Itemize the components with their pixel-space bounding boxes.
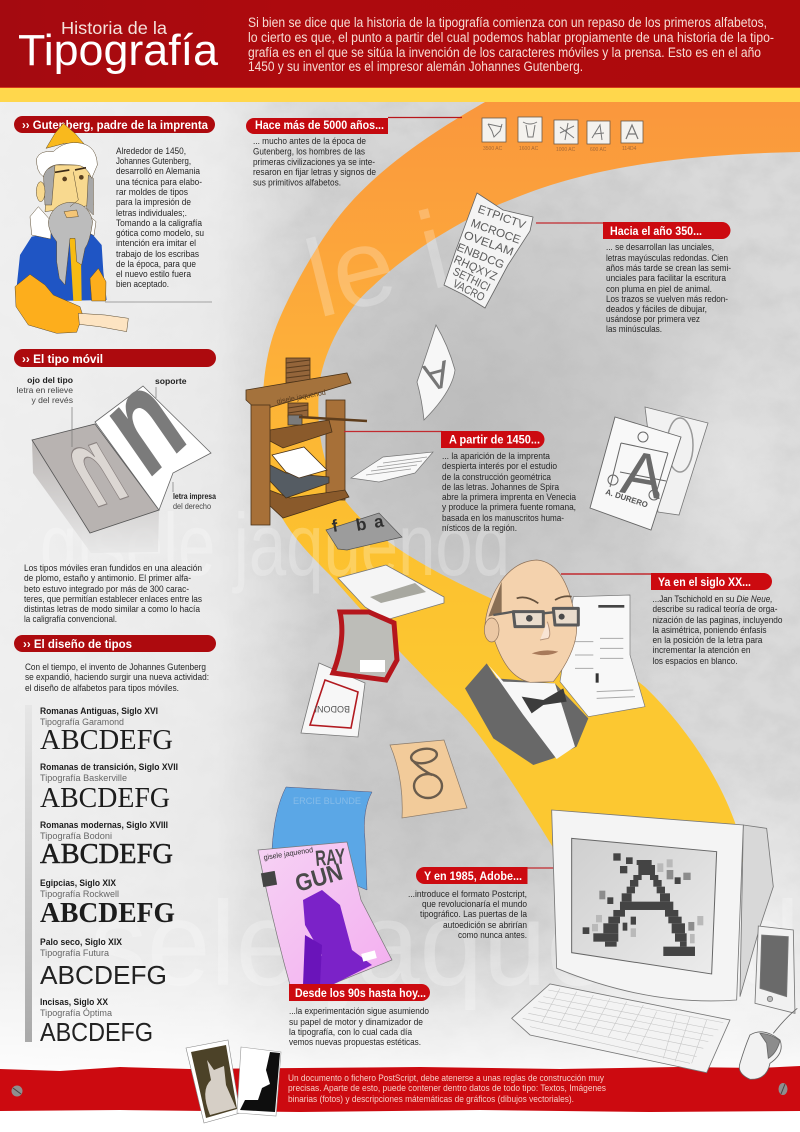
callout: Ya en el siglo XX: ...Jan Tschichold en su Die Neue,	[652, 593, 772, 604]
typeface: Rockwell: ABCDEFG	[40, 898, 175, 929]
text: tipos móviles: teres, que permitían establecer enlaces entre las	[24, 593, 202, 604]
typeface: Rockwell: Tipografía Rockwell	[40, 889, 119, 900]
callout: Y en 1985, Adobe: que revolucionaría el mundo	[422, 898, 527, 909]
typeface: Garamond: Romanas Antiguas, Siglo XVI	[40, 706, 158, 716]
callout: Desde los 90s: la tipografía, con lo cual cada día	[289, 1026, 413, 1037]
typeface: Baskerville	[40, 762, 178, 814]
timeline road	[262, 102, 800, 862]
table line	[105, 301, 212, 303]
callout: Hacia el año 350: con pluma en piel de animal.	[606, 283, 712, 294]
text: Gutenberg: una técnica para elabo-	[116, 176, 202, 187]
illustration: Dürer construction sheets: A. DURERO	[604, 487, 649, 509]
footer band	[0, 1066, 800, 1112]
callout: Y en 1985, Adobe: autoedición se abrirían	[443, 919, 527, 930]
illustration: metal type blocks	[326, 511, 402, 550]
callout: Hace más de 5000 años: Gutenberg, los hombres de las	[253, 146, 365, 156]
panel: El diseño de tipos heading: ›› El diseño de tipos	[23, 637, 132, 651]
illustration: stack of printed papers	[338, 565, 444, 620]
panel: El tipo móvil heading: ›› El tipo móvil	[22, 352, 103, 366]
callout: Hace más de 5000 años: primeras civilizaciones ya se inte-	[253, 156, 375, 167]
callout: Hacia el año 350: letras mayúsculas redondas. Cien	[606, 252, 728, 263]
typeface: Futura: Tipografía Futura	[40, 948, 110, 959]
callout: A partir de 1450: de la construcción geométrica	[442, 471, 552, 482]
callout: A partir de 1450: A partir de 1450...	[449, 432, 540, 446]
illustration: Ray Gun magazine: gisele jaquenod	[263, 845, 314, 862]
callout: Hacia el año 350: Hacia el año 350...	[610, 224, 702, 238]
callout: Hacia el año 350: años más tarde se crean las semi-	[606, 262, 731, 273]
typeface timeline bar	[25, 705, 32, 1042]
icons: early alphabets	[482, 117, 643, 153]
footer text: Un documento o fichero PostScript, debe atenerse a unas reglas de construcción muy	[288, 1072, 604, 1083]
illustration: metal type blocks: b	[354, 514, 368, 535]
typeface: Futura: ABCDEFG	[40, 960, 167, 990]
illustration: red framed layout	[333, 612, 397, 680]
icons: early alphabets: 3500 AC	[483, 146, 503, 152]
text: Gutenberg: el nuevo estilo fuera	[116, 268, 192, 279]
illustration: metal type blocks: a	[372, 511, 386, 532]
callout: Hace más de 5000 años: Hace más de 5000 años...	[255, 118, 384, 132]
illustration: flying printed page	[351, 452, 433, 482]
illustration: Jan Tschichold portrait	[465, 560, 645, 765]
monitor	[552, 810, 773, 1001]
typeface: Futura	[40, 937, 167, 990]
illustration: computer	[512, 810, 797, 1079]
callout: Y en 1985, Adobe: Y en 1985, Adobe...	[424, 869, 522, 883]
diagram: movable type	[17, 337, 216, 553]
text: Gutenberg: gótica como modelo, su	[116, 227, 204, 238]
footer text: precisas. Aparte de esto, puede contener dentro datos de todo tipo: Textos, Imágenes	[288, 1082, 606, 1093]
illustration: uncial letters sheet: ENBDCG	[455, 242, 506, 272]
label: letra impresa: del derecho	[173, 501, 211, 511]
callout: Hacia el año 350: Los trazos se vuelven más redon-	[606, 293, 728, 304]
typeface: Optima: Incisas, Siglo XX	[40, 997, 109, 1007]
pixel letter A	[583, 853, 695, 956]
callout: Desde los 90s	[289, 984, 430, 1047]
text: tipos móviles: la caligrafía convencional.	[24, 613, 117, 624]
typeface: Rockwell: Egipcias, Siglo XIX	[40, 878, 117, 888]
typeface: Optima	[40, 997, 153, 1047]
callout: Hace más de 5000 años: sus primitivos alfabetos.	[253, 176, 341, 188]
watermark: le i	[294, 188, 460, 341]
callout: Y en 1985, Adobe: tipográfico. Las puertas de la	[420, 908, 528, 919]
illustration: uncial letters sheet: ETPICTV	[476, 204, 527, 232]
intro text	[248, 15, 774, 74]
callout: Hace más de 5000 años: resaron en fijar letras y signos de	[253, 166, 376, 177]
typeface: Baskerville: Tipografía Baskerville	[40, 773, 127, 784]
text: diseño de tipos: el diseño de alfabetos para tipos móviles.	[25, 682, 179, 693]
text: Gutenberg: bien aceptado.	[116, 278, 169, 289]
callout: Ya en el siglo XX: la asimétrica, poniendo énfasis	[652, 624, 767, 635]
typeface: Bodoni	[40, 820, 173, 870]
icon: right screw	[778, 1083, 788, 1095]
illustration: uncial letters sheet: RHQXYZ	[452, 254, 499, 283]
text: diseño de tipos: Con el tiempo, el invento de Johannes Gutenberg	[25, 661, 206, 672]
illustration: Ray Gun magazine	[258, 842, 392, 985]
text: tipos móviles: beto estuvo integrado por más de 300 carac-	[24, 583, 189, 594]
icons: early alphabets: 1000 AC	[556, 147, 576, 153]
illustration: Ray Gun magazine: GUN	[292, 859, 346, 898]
callout: A partir de 1450: nísticos de la región.	[442, 522, 517, 533]
text: tipos móviles: de plomo, estaño y antimonio. El primer alfa-	[24, 572, 191, 583]
typeface: Optima: Tipografía Óptima	[40, 1008, 113, 1019]
text: Gutenberg: desarrolló en Alemania	[116, 165, 201, 176]
header band	[0, 0, 800, 102]
callout: Ya en el siglo XX: en la posición de la letra para	[652, 634, 763, 645]
text: Gutenberg: intención era imitar el	[116, 237, 196, 248]
panel: El tipo móvil heading	[14, 349, 216, 367]
typeface: Bodoni: Romanas modernas, Siglo XVIII	[40, 820, 168, 830]
callout: Desde los 90s: vemos nuevas propuestas estéticas.	[289, 1036, 421, 1047]
callout: Ya en el siglo XX: describe su radical teoría de orga-	[652, 603, 778, 614]
typeface: Optima: ABCDEFG	[40, 1017, 153, 1047]
callout: Desde los 90s: Desde los 90s hasta hoy...	[295, 986, 426, 1000]
text: diseño de tipos: se expandió, haciendo surgir una nueva actividad:	[25, 671, 209, 682]
callout: A partir de 1450	[344, 431, 577, 533]
illustration: Ray Gun magazine: RAY	[314, 843, 347, 871]
text: tipos móviles	[24, 562, 202, 624]
text: tipos móviles: distintas letras de modo similar a como lo hacía	[24, 603, 201, 614]
illustration: cat photo	[186, 1040, 240, 1123]
illustration: blue magazine sheet	[272, 787, 372, 890]
illustration: Gutenberg portrait	[15, 123, 128, 333]
callout: Ya en el siglo XX: nización de las paginas, incluyendo	[652, 614, 782, 625]
intro text: 1450 y su inventor es el impresor alemán Johannes Gutenberg.	[248, 59, 583, 74]
illustration: black and white card	[237, 1047, 281, 1116]
text: diseño de tipos	[25, 661, 209, 693]
illustration: Bodoni poster: BODONI	[314, 704, 350, 714]
label: soporte: soporte	[155, 376, 187, 386]
watermark	[40, 188, 800, 1011]
text: Gutenberg: rar moldes de tipos	[116, 186, 188, 197]
illustration: uncial letters sheet: MCROCE	[469, 218, 522, 247]
illustration: flying letter sheet	[417, 325, 455, 420]
illustration: uncial letters sheet	[444, 193, 533, 308]
footer text: binarias (fotos) y descripciones mátemáticas de gráficos (dibujos vectoriales).	[288, 1093, 574, 1104]
illustration: printing press	[246, 358, 367, 525]
mouse	[739, 1008, 797, 1079]
callout: Hace más de 5000 años	[246, 118, 462, 188]
text: Gutenberg: Tomando a la caligrafía	[116, 217, 203, 228]
text: Gutenberg: Alrededor de 1450,	[116, 145, 186, 156]
icon: left screw	[12, 1086, 22, 1096]
panel: Gutenberg heading: ›› Gutenberg, padre de la imprenta	[22, 118, 208, 132]
callout: A partir de 1450: ... la aparición de la imprenta	[442, 450, 551, 461]
typeface: Baskerville: ABCDEFG	[40, 783, 170, 814]
callout: A partir de 1450: de las letras. Johannes de Spira	[442, 481, 560, 492]
text: Gutenberg: Johannes Gutenberg,	[116, 155, 191, 166]
label: letra impresa: letra impresa	[173, 491, 216, 501]
text: Gutenberg: de la época, para que	[116, 258, 196, 269]
callout: Ya en el siglo XX: incrementar la atención en	[652, 644, 750, 655]
title: Tipografía	[18, 26, 219, 75]
callout: Hacia el año 350: ... se desarrollan las unciales,	[606, 241, 714, 252]
illustration: flying letter sheet: A	[419, 351, 455, 399]
callout: Hacia el año 350: unciales para facilitar la escritura	[606, 272, 727, 283]
text: tipos móviles: Los tipos móviles eran fundidos en una aleación	[24, 562, 202, 573]
typeface: Baskerville: Romanas de transición, Siglo XVII	[40, 762, 178, 772]
icons: early alphabets: 114D4	[622, 146, 637, 152]
callout: Hacia el año 350: deados y fáciles de dibujar,	[606, 303, 707, 314]
callout: Y en 1985, Adobe: ...introduce el formato Postcript,	[408, 888, 527, 899]
text: Gutenberg: para la impresión de	[116, 196, 191, 207]
illustration: printing press: gisele jaquenod	[276, 388, 326, 406]
callout: Y en 1985, Adobe	[408, 867, 554, 940]
typeface: Bodoni: Tipografía Bodoni	[40, 831, 112, 842]
icons: early alphabets: 600 AC	[590, 147, 607, 153]
label: ojo del tipo: ojo del tipo	[27, 375, 73, 385]
illustration: Dürer construction sheets: A	[617, 438, 670, 513]
callout: A partir de 1450: y produce la primera fuente romana,	[442, 501, 576, 512]
label: letra impresa	[173, 482, 216, 511]
keyboard	[512, 984, 730, 1073]
illustration: metal type blocks: f	[330, 516, 340, 536]
callout: Hacia el año 350	[536, 222, 731, 334]
footer text	[288, 1072, 606, 1104]
label: ojo del tipo	[17, 375, 73, 447]
diagram: movable type: n	[40, 404, 146, 530]
typeface: Futura: Palo seco, Siglo XIX	[40, 937, 123, 947]
illustration: Dürer construction sheets	[590, 407, 708, 530]
typeface: Garamond: ABCDEFG	[40, 725, 173, 756]
typeface: Bodoni: ABCDEFG	[40, 839, 173, 870]
text: Gutenberg	[116, 145, 204, 289]
label: ojo del tipo: y del revés	[31, 395, 73, 405]
callout: Y en 1985, Adobe: como nunca antes.	[458, 929, 527, 940]
callout: A partir de 1450: despierta interés por el estudio	[442, 460, 557, 471]
text: Gutenberg: trabajo de los escribas	[116, 248, 199, 259]
text: Gutenberg: letras individuales;.	[116, 207, 187, 218]
illustration: uncial letters sheet: VACRO	[451, 278, 486, 304]
label: soporte	[155, 376, 187, 398]
typeface: Garamond: Tipografía Garamond	[40, 717, 124, 728]
watermark: gisele jaquenod	[40, 495, 510, 594]
illustration: uncial letters sheet: OVELAM	[462, 230, 515, 259]
typeface: Garamond	[40, 706, 173, 756]
title: Historia de la	[61, 18, 167, 38]
illustration: tan sketch sheet	[390, 740, 467, 818]
callout: A partir de 1450: basada en los manuscritos huma-	[442, 512, 564, 523]
callout: A partir de 1450: abre la primera imprenta en Venecia	[442, 491, 577, 502]
speaker	[755, 926, 795, 1013]
illustration: Bodoni poster	[301, 663, 365, 737]
callout: Ya en el siglo XX	[561, 573, 782, 666]
callout: Hacia el año 350: usándose por primera vez	[606, 313, 700, 324]
label: ojo del tipo: letra en relieve	[17, 385, 73, 395]
callout: Hace más de 5000 años: ... mucho antes de la época de	[253, 135, 366, 146]
callout: Desde los 90s: ...la experimentación sigue asumiendo	[289, 1005, 429, 1016]
typeface: Rockwell	[40, 878, 175, 929]
icons: early alphabets: 1600 AC	[519, 146, 539, 152]
diagram: movable type: n	[75, 337, 208, 506]
callout: Desde los 90s: su papel de motor y dinamizador de	[289, 1016, 423, 1027]
panel: El diseño de tipos heading	[14, 635, 216, 652]
illustration: uncial letters sheet: SETHICI	[451, 266, 492, 294]
callout: Hacia el año 350: las minúsculas.	[606, 323, 662, 334]
callout: Ya en el siglo XX: Ya en el siglo XX...	[658, 575, 751, 589]
callout: Ya en el siglo XX: los espacios en blanco.	[652, 655, 738, 666]
illustration: blue magazine sheet: ERCIE BLUNDE	[293, 796, 361, 806]
